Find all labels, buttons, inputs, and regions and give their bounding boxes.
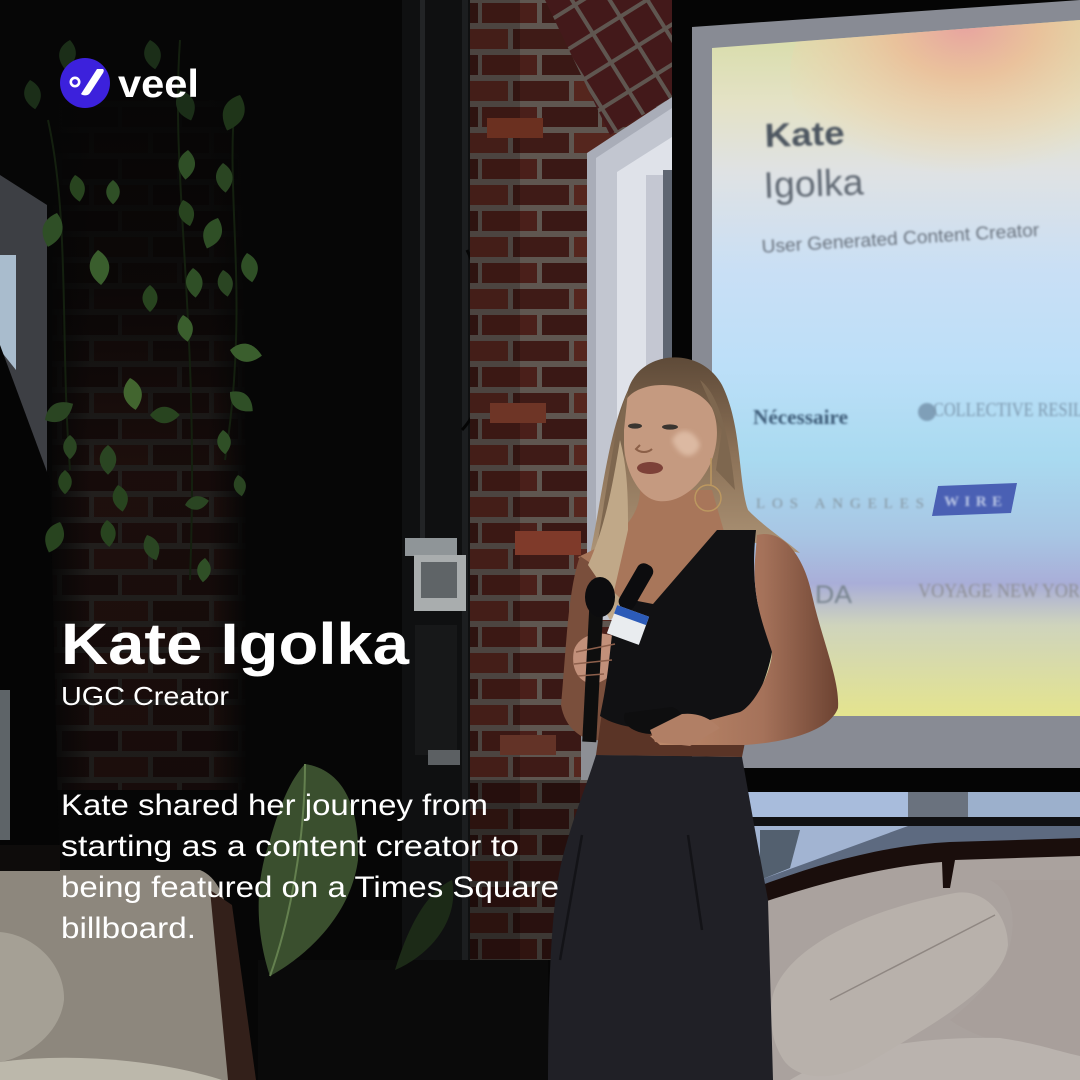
black sleeveless top: [600, 530, 772, 729]
hoop earring: [695, 458, 721, 511]
microphone front: [582, 577, 615, 742]
projected slide background: [712, 20, 1080, 716]
back cushion: [950, 880, 1080, 1060]
neck and chest: [578, 490, 725, 606]
mouth: [637, 462, 663, 474]
sofa back cushions: [764, 855, 1080, 1080]
logo circle: [60, 58, 110, 108]
logo: Wire badge: [932, 483, 1017, 516]
veel logo: [60, 58, 199, 108]
dark column and cables: [252, 0, 490, 1080]
body text: starting as a content creator to: [61, 830, 519, 863]
low dark table: [258, 960, 548, 1080]
midriff: [596, 708, 752, 757]
sofa armrest wood: [210, 890, 256, 1080]
wall equipment box: [405, 538, 466, 765]
hand on phone: [650, 714, 720, 746]
screen frame: [692, 0, 1080, 768]
window below screen: [748, 792, 1080, 892]
body text: being featured on a Times Square: [61, 871, 559, 904]
trousers: [548, 755, 773, 1080]
hand: holding microphone: [573, 634, 623, 684]
sofa seat: [0, 1058, 222, 1080]
face: [623, 385, 717, 501]
arm: holding phone: [650, 534, 838, 745]
left brick wall: [52, 100, 247, 790]
speaker: Kate Igolka on stage: [548, 357, 838, 1080]
microphone back: [616, 561, 656, 612]
large green foreground leaf: [259, 764, 453, 976]
body text: [61, 789, 559, 945]
side hair over face: [598, 380, 735, 560]
nose: [636, 445, 652, 452]
blond hair strands: [588, 440, 628, 600]
name badge: [607, 605, 649, 645]
bolster pillow: [771, 892, 1008, 1076]
slide name: Kate: Kate: [764, 114, 845, 154]
hanging ivy vines: [22, 39, 263, 583]
subtitle: role: UGC Creator: [61, 681, 229, 711]
title: speaker name: Kate Igolka: [61, 612, 410, 677]
body text: Kate shared her journey from: [61, 789, 488, 822]
fingers: [574, 644, 615, 676]
left window frame: [0, 175, 60, 900]
phone: [624, 707, 682, 734]
slide name: Igolka: Igolka: [763, 162, 865, 206]
sofa wood frame: [762, 838, 1080, 902]
projection screen: [672, 0, 1080, 792]
white door frame: [581, 97, 672, 780]
sofa seat: [790, 1038, 1080, 1080]
logo wordmark: veel: [118, 63, 199, 106]
body text: billboard.: [61, 912, 196, 945]
slide warm glow: [796, 20, 1080, 160]
logo: Los Angeles: LOS ANGELES: [756, 496, 924, 512]
logo: Wire text: WIRE: [944, 494, 1002, 510]
slide role: User Generated Content Creator: [761, 220, 1040, 257]
right sofa: [762, 838, 1080, 1080]
logo: Necessaire: Nécessaire: [753, 405, 848, 429]
sofa cushion: [0, 932, 64, 1062]
eyes: [628, 423, 678, 430]
arm: holding microphone: [561, 556, 612, 740]
back hair: [585, 357, 800, 620]
right brick wall: [470, 0, 672, 960]
left sofa: [0, 845, 256, 1080]
logo: Collective Resilience star: [918, 403, 936, 421]
logo: DA: DA: [815, 581, 852, 609]
logo mark: [71, 69, 104, 95]
